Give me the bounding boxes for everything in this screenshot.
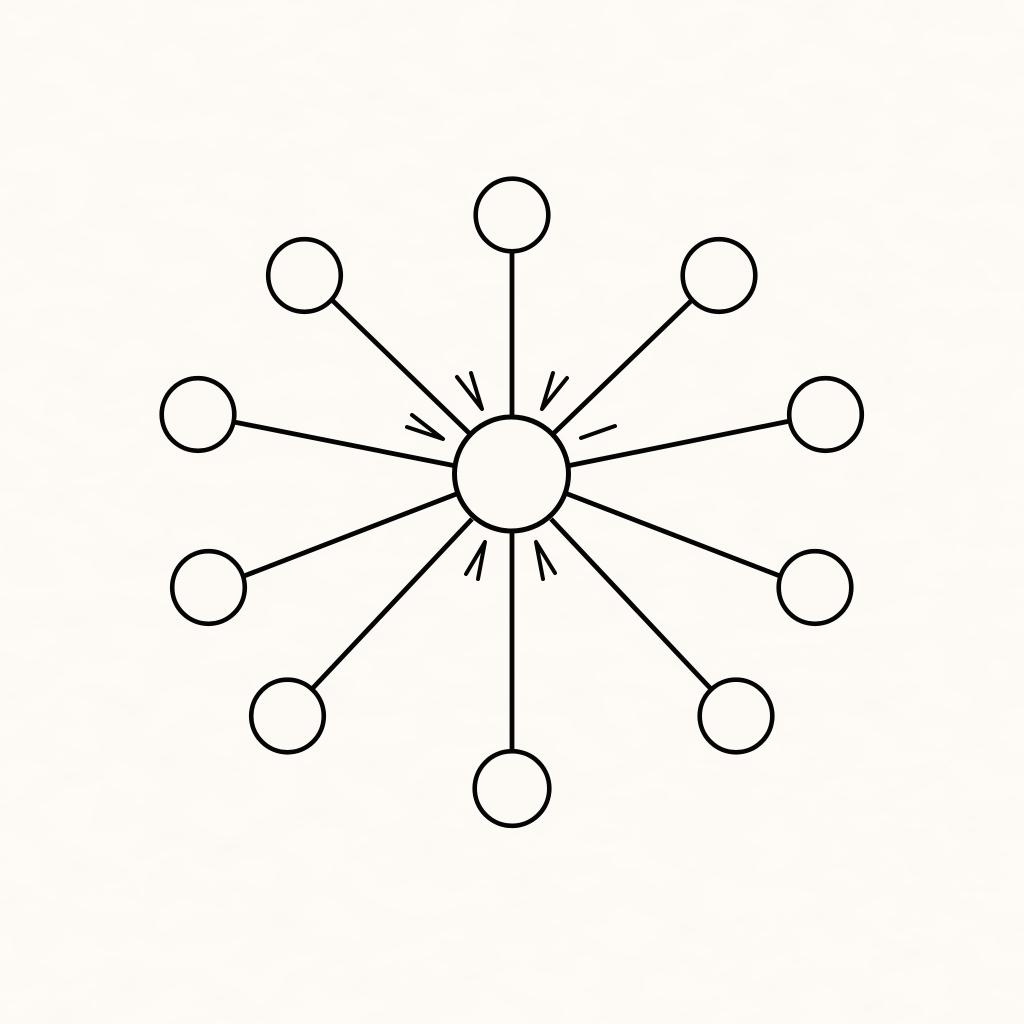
spoke: lower right — [565, 493, 780, 576]
node: bottom — [475, 751, 549, 826]
spoke: upper right — [554, 300, 692, 433]
spoke: lower left — [244, 493, 459, 576]
node: upper left — [268, 239, 341, 312]
spoke: bottom right — [551, 519, 711, 689]
node: right — [789, 378, 862, 451]
spoke: bottom — [510, 531, 514, 751]
center hub circle — [454, 417, 568, 531]
radiating tick marks around hub — [407, 373, 615, 579]
node: lower right — [779, 551, 851, 624]
node: bottom right — [700, 680, 772, 752]
node: lower left — [172, 551, 245, 624]
node: bottom left — [251, 680, 324, 752]
spoke: right — [567, 421, 790, 466]
node: top — [476, 179, 548, 251]
tick: right — [581, 426, 615, 438]
tick: bottom right — [536, 542, 555, 579]
tick: upper left — [407, 415, 443, 439]
outer nodes — [162, 179, 862, 826]
spokes — [234, 250, 790, 751]
spoke: upper left — [332, 300, 469, 433]
tick: top right — [542, 373, 567, 409]
spoke: bottom left — [312, 519, 472, 689]
spoke: top — [510, 250, 514, 417]
node: upper right — [683, 239, 755, 312]
tick: top left — [457, 373, 482, 409]
spoke: left — [234, 422, 456, 466]
tick: bottom left — [466, 542, 485, 579]
node: left — [162, 378, 234, 451]
